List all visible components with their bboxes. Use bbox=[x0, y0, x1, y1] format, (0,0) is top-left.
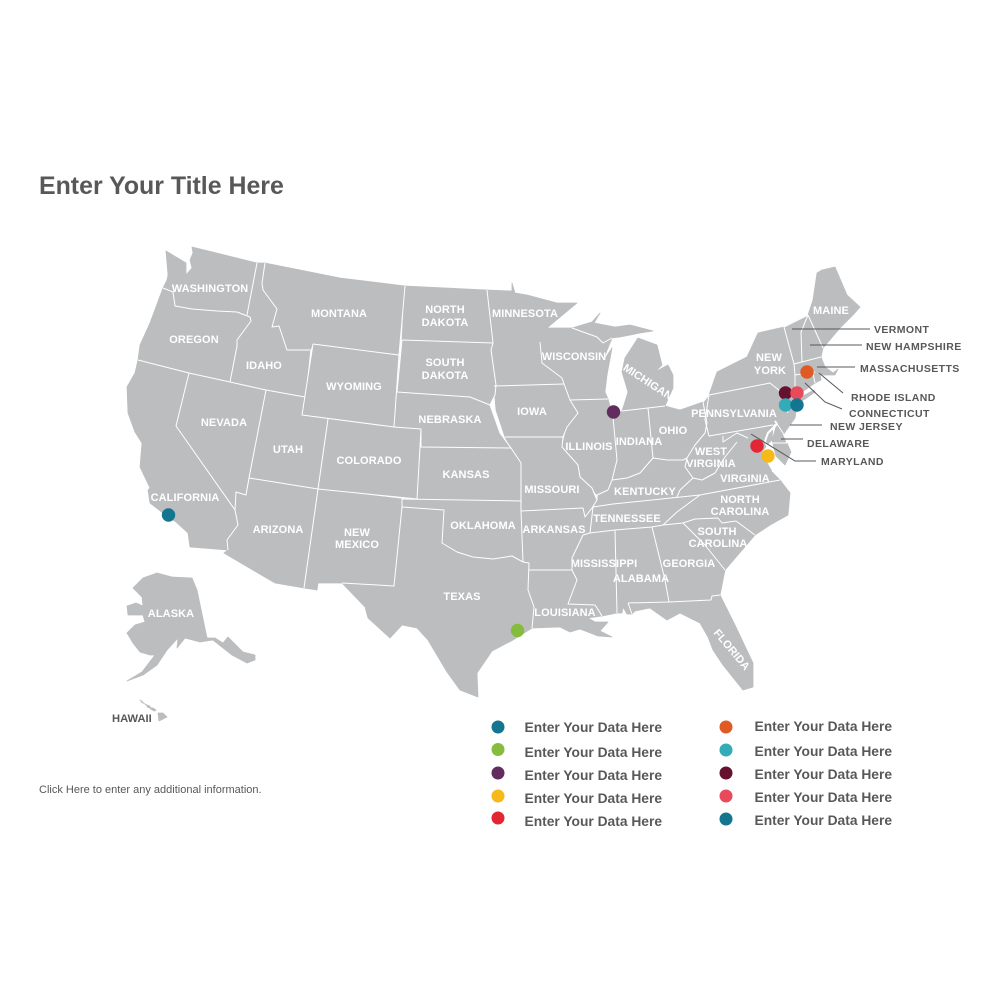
label: New York: YORK bbox=[754, 365, 786, 377]
state: Ohio bbox=[648, 402, 707, 460]
label: West Virginia: WEST bbox=[695, 446, 727, 458]
label: Iowa: IOWA bbox=[517, 406, 547, 418]
label: Wisconsin: WISCONSIN bbox=[542, 351, 606, 363]
callout: Connecticut: CONNECTICUT bbox=[849, 408, 930, 420]
leader lines bbox=[751, 329, 870, 461]
state: North Dakota bbox=[402, 286, 493, 343]
state: Illinois bbox=[562, 399, 617, 495]
callout: New Jersey: NEW JERSEY bbox=[830, 421, 903, 433]
label: Florida: FLORIDA bbox=[711, 627, 752, 673]
state borders bbox=[138, 263, 823, 628]
state: Kansas bbox=[417, 447, 521, 501]
state: Montana bbox=[262, 263, 405, 355]
leader: Maryland bbox=[751, 434, 816, 461]
state: South Carolina bbox=[683, 518, 755, 570]
state: Rhode Island bbox=[813, 373, 821, 383]
label: South Carolina: CAROLINA bbox=[689, 538, 747, 550]
marker: blue bbox=[790, 398, 804, 412]
callout: Vermont: VERMONT bbox=[874, 324, 929, 336]
state: Arizona bbox=[224, 478, 318, 588]
footnote: Click Here to enter any additional information. bbox=[39, 784, 262, 796]
label: Virginia: VIRGINIA bbox=[720, 473, 770, 485]
state: California bbox=[127, 360, 238, 550]
state: Colorado bbox=[318, 419, 421, 499]
state: Iowa bbox=[494, 384, 578, 437]
state: Oklahoma bbox=[402, 499, 523, 562]
label: Montana: MONTANA bbox=[311, 308, 367, 320]
legend item 7: Enter Your Data Here bbox=[754, 744, 892, 759]
state: Kentucky bbox=[593, 458, 693, 507]
state: Connecticut bbox=[795, 373, 815, 392]
label: Kentucky: KENTUCKY bbox=[614, 486, 677, 498]
state: Georgia bbox=[652, 523, 725, 602]
marker: Texas bbox=[511, 624, 524, 637]
leader: Delaware bbox=[781, 438, 803, 440]
marker: yellow bbox=[761, 449, 775, 463]
label: Indiana: INDIANA bbox=[616, 436, 662, 448]
state: Pennsylvania bbox=[703, 383, 788, 436]
state: Michigan lower bbox=[622, 338, 673, 411]
legend item 5 bbox=[492, 812, 662, 829]
title: Enter Your Title Here bbox=[39, 172, 284, 200]
label: Texas: TEXAS bbox=[443, 591, 481, 603]
state: Washington bbox=[163, 247, 257, 317]
state: Massachusetts bbox=[794, 357, 838, 375]
label: Oklahoma: OKLAHOMA bbox=[450, 520, 516, 532]
leader: New Hampshire bbox=[810, 344, 862, 346]
state: Long Island bbox=[792, 390, 815, 405]
state: Maine bbox=[808, 267, 860, 348]
state: New York bbox=[709, 327, 795, 395]
label: North Carolina: NORTH bbox=[720, 494, 760, 506]
marker: Massachusetts bbox=[800, 365, 814, 379]
label: Washington: WASHINGTON bbox=[172, 283, 248, 295]
label: Kansas: KANSAS bbox=[442, 469, 490, 481]
label: Illinois: ILLINOIS bbox=[565, 441, 613, 453]
leader: Rhode Island bbox=[819, 373, 843, 393]
map of the United States bbox=[127, 247, 860, 721]
label: Minnesota: MINNESOTA bbox=[492, 308, 558, 320]
state: New Jersey bbox=[775, 391, 798, 435]
label: Michigan: MICHIGAN bbox=[621, 362, 675, 403]
marker: Illinois bbox=[607, 405, 620, 419]
state: Mississippi bbox=[568, 530, 617, 616]
legend item 5: Enter Your Data Here bbox=[524, 814, 662, 829]
state: Arkansas bbox=[521, 507, 593, 570]
state: Indiana bbox=[612, 408, 653, 480]
label: North Dakota: NORTH bbox=[425, 304, 465, 316]
state: Nebraska bbox=[394, 392, 511, 448]
label: Nevada: NEVADA bbox=[201, 417, 247, 429]
legend item 2: Enter Your Data Here bbox=[524, 745, 662, 760]
state: Oregon bbox=[138, 288, 251, 382]
label: Idaho: IDAHO bbox=[246, 360, 282, 372]
label: North Carolina: CAROLINA bbox=[711, 506, 769, 518]
state: Vermont bbox=[784, 315, 808, 364]
leader: Vermont bbox=[792, 328, 870, 330]
state: Louisiana bbox=[528, 570, 612, 637]
label: South Dakota: SOUTH bbox=[426, 357, 464, 369]
state: Delaware and eastern shore bbox=[772, 424, 791, 465]
legend item 9: Enter Your Data Here bbox=[754, 790, 892, 805]
leader: New Jersey bbox=[790, 424, 822, 426]
state: Virginia bbox=[677, 438, 780, 497]
state: Alaska bbox=[127, 573, 255, 681]
state: North Carolina bbox=[663, 480, 790, 535]
state: New Hampshire bbox=[801, 315, 823, 362]
label: Utah: UTAH bbox=[273, 444, 303, 456]
label: New Mexico: NEW bbox=[344, 527, 370, 539]
state: Alabama bbox=[615, 527, 669, 614]
legend item 6: Enter Your Data Here bbox=[754, 719, 892, 734]
label: Tennessee: TENNESSEE bbox=[593, 513, 661, 525]
state: Hawaii bbox=[158, 713, 167, 721]
state: Nevada bbox=[176, 373, 266, 510]
state: New Mexico bbox=[304, 489, 402, 590]
leader: Connecticut bbox=[805, 383, 842, 409]
legend item 3: Enter Your Data Here bbox=[524, 768, 662, 783]
label: Oregon: OREGON bbox=[169, 334, 219, 346]
callout labels bbox=[112, 324, 962, 725]
state: Maryland bbox=[709, 425, 773, 452]
marker: dark red bbox=[779, 386, 792, 400]
marker: pink bbox=[790, 386, 804, 400]
label: New Mexico: MEXICO bbox=[335, 539, 379, 551]
label: West Virginia: VIRGINIA bbox=[686, 458, 736, 470]
state: Utah bbox=[249, 390, 328, 489]
legend item 8: Enter Your Data Here bbox=[754, 767, 892, 782]
label: Colorado: COLORADO bbox=[337, 455, 402, 467]
Hawaii islets bbox=[140, 700, 156, 711]
state: Wisconsin bbox=[540, 328, 612, 401]
marker: teal bbox=[779, 398, 792, 412]
state: Missouri bbox=[505, 437, 597, 517]
label: Ohio: OHIO bbox=[659, 425, 688, 437]
label: Arkansas: ARKANSAS bbox=[522, 524, 586, 536]
callout: Rhode Island: RHODE ISLAND bbox=[851, 392, 936, 404]
label: North Dakota: DAKOTA bbox=[422, 317, 468, 329]
legend item 10: Enter Your Data Here bbox=[754, 813, 892, 828]
state: Michigan upper bbox=[572, 313, 653, 343]
label: Mississippi: MISSISSIPPI bbox=[571, 558, 637, 570]
callout: Delaware: DELAWARE bbox=[807, 438, 870, 450]
state: Idaho bbox=[230, 263, 310, 397]
state: West Virginia bbox=[685, 423, 748, 480]
state: Florida bbox=[628, 595, 753, 690]
state: Minnesota bbox=[487, 283, 577, 386]
label: Arizona: ARIZONA bbox=[253, 524, 303, 536]
marker: red bbox=[750, 439, 764, 453]
legend bbox=[492, 719, 892, 829]
state: Tennessee bbox=[590, 495, 700, 533]
callout: Massachusetts: MASSACHUSETTS bbox=[860, 363, 960, 375]
legend item 4: Enter Your Data Here bbox=[524, 791, 662, 806]
legend item 1: Enter Your Data Here bbox=[524, 720, 662, 735]
state: Texas bbox=[342, 507, 534, 697]
label: South Dakota: DAKOTA bbox=[422, 370, 468, 382]
callout: New Hampshire: NEW HAMPSHIRE bbox=[866, 341, 962, 353]
label: California: CALIFORNIA bbox=[151, 492, 219, 504]
label: Nebraska: NEBRASKA bbox=[418, 414, 482, 426]
callout: Hawaii: HAWAII bbox=[112, 713, 152, 725]
label: Maine: MAINE bbox=[813, 305, 849, 317]
leader: Massachusetts bbox=[817, 366, 855, 368]
label: South Carolina: SOUTH bbox=[698, 526, 736, 538]
label: New York: NEW bbox=[756, 352, 782, 364]
label: Missouri: MISSOURI bbox=[524, 484, 580, 496]
callout: Maryland: MARYLAND bbox=[821, 456, 884, 468]
label: Pennsylvania: PENNSYLVANIA bbox=[691, 408, 777, 420]
label: Georgia: GEORGIA bbox=[663, 558, 715, 570]
label: Louisiana: LOUISIANA bbox=[534, 607, 596, 619]
state labels bbox=[148, 283, 849, 673]
map markers bbox=[162, 365, 814, 637]
label: Wyoming: WYOMING bbox=[326, 381, 382, 393]
state: Wyoming bbox=[302, 344, 399, 427]
marker: California bbox=[162, 508, 175, 522]
label: Alabama: ALABAMA bbox=[613, 573, 669, 585]
label: Alaska: ALASKA bbox=[148, 608, 194, 620]
state: South Dakota bbox=[397, 340, 496, 405]
